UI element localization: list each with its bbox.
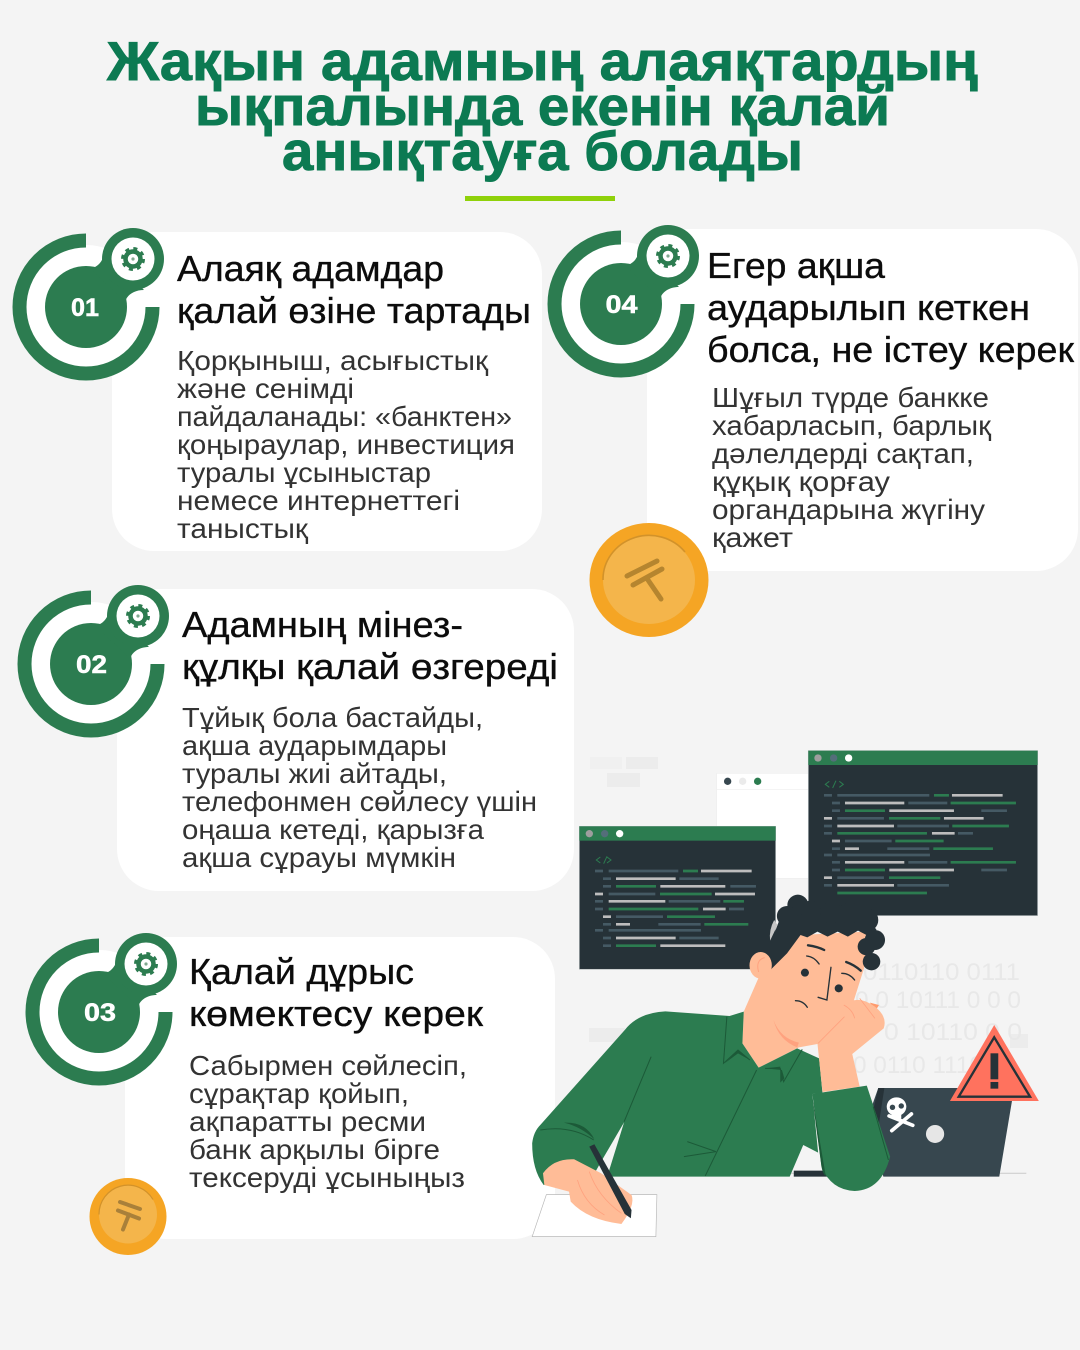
- shirt: [532, 1011, 823, 1185]
- skull sticker: [887, 1097, 913, 1131]
- text: card 01 body: немесе интернеттегі: [177, 485, 460, 516]
- illustration: right code window: [808, 751, 1038, 916]
- panel: card 01: [112, 232, 542, 551]
- background illustration: binary digits: 0 0 10111 0 0 0: [855, 987, 1021, 1014]
- writing hand: [543, 1159, 632, 1224]
- desk line: [790, 1172, 1026, 1175]
- text: card 02 body: оңаша кетеді, қарызға: [182, 814, 484, 845]
- right sleeve: [812, 1086, 890, 1191]
- panel: card 03: [125, 937, 555, 1239]
- text: card 04 body: құқық қорғау: [712, 466, 890, 497]
- text: card 01 body: Қорқыныш, асығыстық: [177, 345, 489, 376]
- heading: card 02: құлқы қалай өзгереді: [182, 646, 558, 687]
- background illustration: binary digits: [853, 959, 1022, 1079]
- icon: badge 04: 04: [606, 291, 638, 319]
- heading: card 02: [182, 604, 558, 687]
- heading: card 01: [177, 248, 531, 331]
- background illustration: binary digits: 0110110 0111: [863, 959, 1020, 986]
- laptop: [794, 1088, 1014, 1177]
- text: card 02 body: ақша сұрауы мүмкін: [182, 842, 456, 873]
- icon: tenge coin large: [590, 523, 708, 637]
- text: card 02 body: ақша аударымдары: [182, 730, 447, 761]
- heading: card 03: Қалай дұрыс: [189, 951, 414, 992]
- icon: badge 01: 01: [71, 294, 99, 322]
- icon: badge 03: 03: [84, 999, 116, 1027]
- hand on cheek: [817, 998, 885, 1092]
- icon: badge 02: [24, 585, 169, 730]
- text: card 03 body: тексеруді ұсыныңыз: [189, 1162, 465, 1193]
- text: card 01 body: пайдаланады: «банктен»: [177, 401, 512, 432]
- text: card 04 body: Шұғыл түрде банкке: [712, 382, 989, 413]
- background illustration: faint blocks: [589, 757, 1028, 1048]
- shirt folds: [540, 1017, 802, 1176]
- heading: card 03: [189, 951, 483, 1034]
- text: card 03 body: Сабырмен сөйлесіп,: [189, 1050, 467, 1081]
- text: card 01 body: және сенімді: [177, 373, 354, 404]
- text: card 01 body: қоңыраулар, инвестиция: [177, 429, 515, 460]
- title: анықтауға болады: [282, 120, 803, 182]
- title accent bar: [465, 196, 615, 201]
- facial features: [795, 945, 861, 1007]
- background illustration: binary digits: 0 10110 0 0: [884, 1019, 1022, 1046]
- text: card 04 body: [712, 382, 992, 553]
- illustration: white browser window: [717, 773, 810, 878]
- heading: card 03: көмектесу керек: [189, 993, 483, 1034]
- heading: card 04: болса, не істеу керек: [707, 329, 1074, 370]
- neck and face: [742, 932, 867, 1068]
- title: ықпалында екенін қалай: [195, 75, 890, 137]
- text: card 02 body: туралы жиі айтады,: [182, 758, 447, 789]
- text: card 01 body: таныстық: [177, 513, 309, 544]
- text: card 04 body: дәлелдерді сақтап,: [712, 438, 974, 469]
- heading: card 04: аударылып кеткен: [707, 287, 1030, 328]
- text: card 03 body: [189, 1050, 467, 1193]
- ear: [750, 952, 772, 979]
- panel: card 02: [117, 589, 574, 891]
- pen: [589, 1144, 632, 1218]
- text: card 03 body: банк арқылы бірге: [189, 1134, 440, 1165]
- icon: badge 03: [32, 933, 177, 1078]
- text: card 04 body: қажет: [712, 522, 793, 553]
- icon: badge 01: [20, 228, 164, 374]
- text: card 02 body: Тұйық бола бастайды,: [182, 702, 483, 733]
- text: card 03 body: сұрақтар қойып,: [189, 1078, 409, 1109]
- heading: card 04: Егер ақша: [707, 245, 886, 286]
- text: card 04 body: органдарына жүгіну: [712, 494, 985, 525]
- paper: [532, 1195, 657, 1237]
- text: card 02 body: [182, 702, 537, 873]
- illustration: left code window: [579, 826, 776, 969]
- heading: card 01: Алаяқ адамдар: [177, 248, 444, 289]
- illustration: worried man at laptop: [532, 895, 1039, 1237]
- text: card 03 body: ақпаратты ресми: [189, 1106, 426, 1137]
- icon: tenge coin small: [90, 1178, 166, 1255]
- icon: badge 04: [554, 225, 699, 370]
- text: card 01 body: туралы ұсыныстар: [177, 457, 431, 488]
- heading: card 04: [707, 245, 1074, 370]
- icon: badge 02: 02: [76, 651, 107, 679]
- heading: card 01: қалай өзіне тартады: [177, 290, 531, 331]
- text: card 02 body: телефонмен сөйлесу үшін: [182, 786, 537, 817]
- title: Жақын адамның алаяқтардың: [106, 30, 978, 92]
- text: card 04 body: хабарласып, барлық: [712, 410, 992, 441]
- text: card 01 body: [177, 345, 515, 544]
- hair: [768, 895, 885, 973]
- title: [106, 30, 978, 182]
- panel: card 04: [647, 229, 1078, 571]
- heading: card 02: Адамның мінез-: [182, 604, 463, 645]
- background illustration: binary digits: 0 0110 1110: [853, 1052, 983, 1079]
- warning triangle: [950, 1025, 1039, 1101]
